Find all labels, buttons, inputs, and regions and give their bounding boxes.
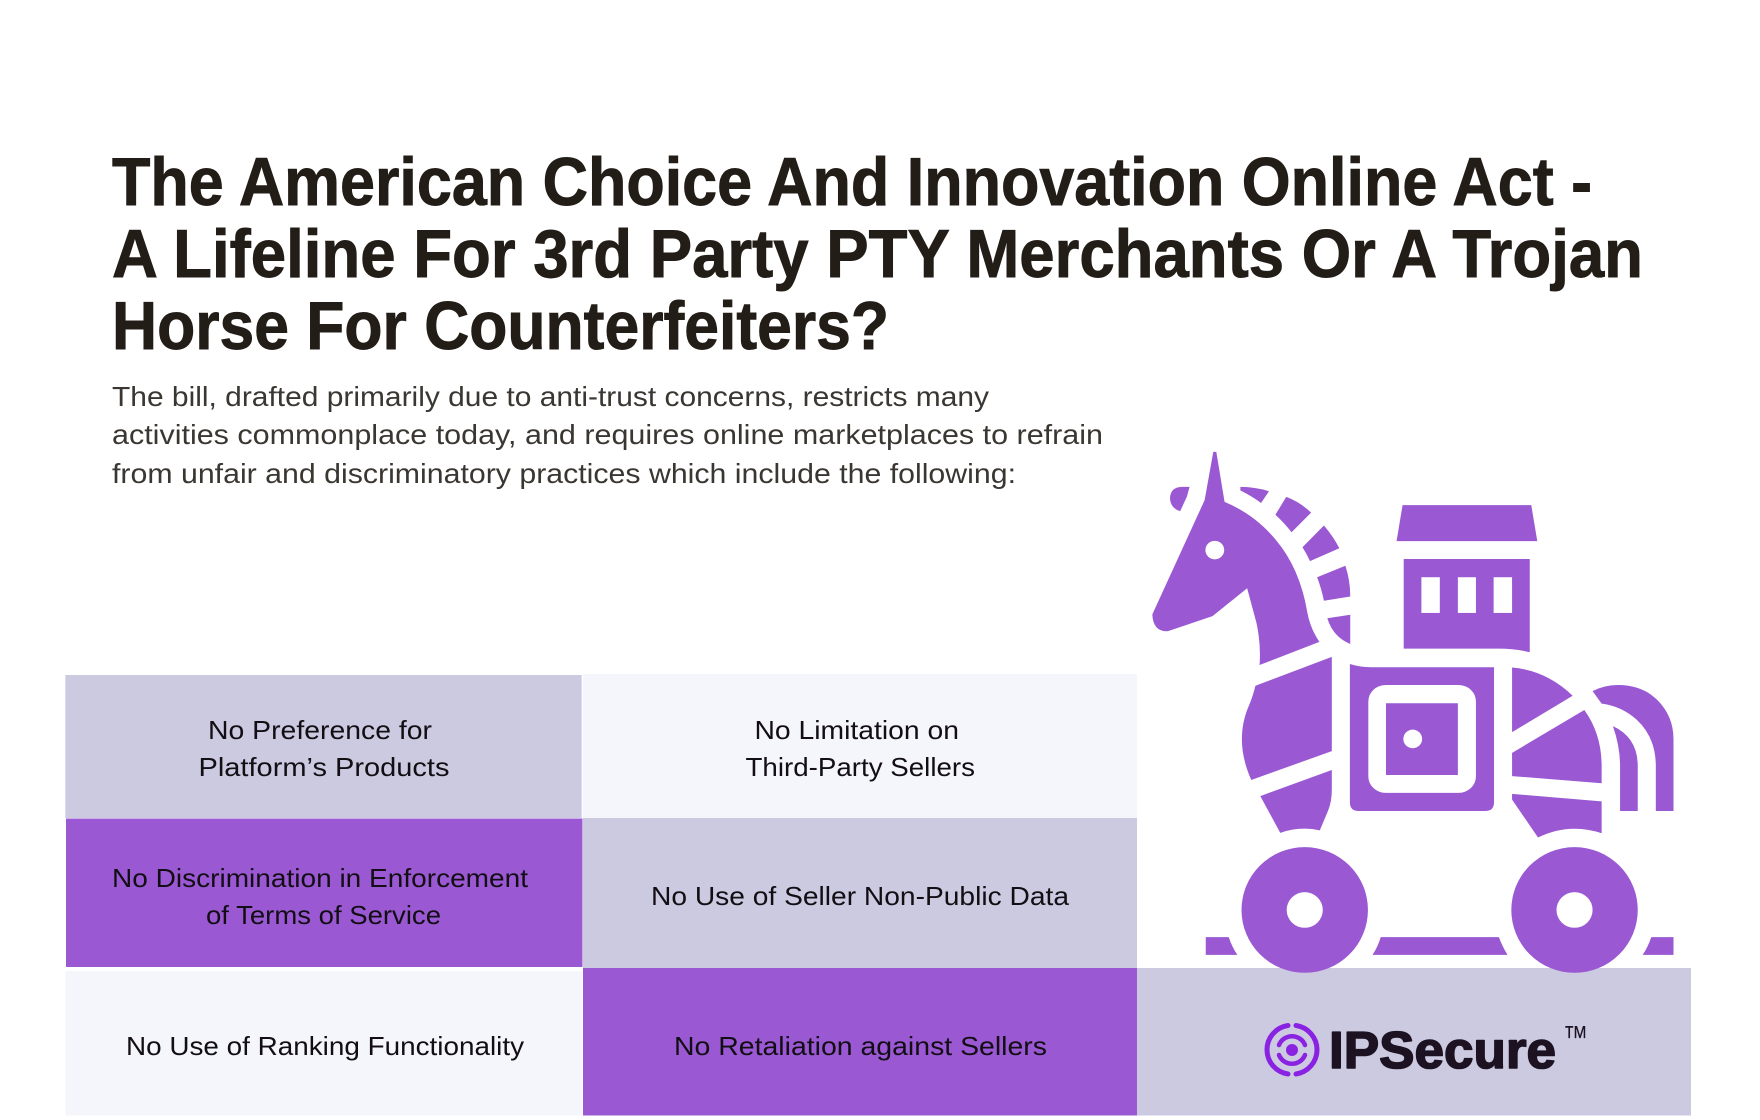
- cell: no use of seller non-public data: [583, 818, 1137, 968]
- panel: logo background: [1137, 968, 1691, 1116]
- cell: no preference for platform's products: [65, 675, 582, 818]
- icon: trojan horse: [1152, 452, 1674, 973]
- logo: IPSecure: IPSecure: [1329, 1022, 1556, 1080]
- cell: no limitation on third-party sellers: Third-Party Sellers: [746, 752, 975, 782]
- logo: IPSecure: ™: [1563, 1019, 1588, 1055]
- cell: no use of ranking functionality: No Use of Ranking Functionality: [126, 1031, 524, 1061]
- intro text: [112, 381, 1103, 489]
- cell: no retaliation against sellers: No Retaliation against Sellers: [674, 1031, 1047, 1061]
- cell: no limitation on third-party sellers: No Limitation on: [754, 715, 959, 745]
- cell: no retaliation against sellers: [583, 968, 1137, 1116]
- icon: logo target mark: [1267, 1026, 1317, 1074]
- cell: no use of ranking functionality: [66, 971, 582, 1116]
- title: A Lifeline For 3rd Party PTY Merchants Or A Trojan: [112, 216, 1643, 292]
- intro text: The bill, drafted primarily due to anti-trust concerns, restricts many: [112, 381, 989, 412]
- logo: IPSecure: [1267, 1019, 1588, 1080]
- intro text: from unfair and discriminatory practices which include the following:: [112, 458, 1016, 489]
- cell: no discrimination in enforcement: No Discrimination in Enforcement: [112, 863, 529, 893]
- cell: no limitation on third-party sellers: [583, 674, 1137, 818]
- cell: no preference for platform's products: No Preference for: [208, 715, 432, 745]
- cell: no discrimination in enforcement: of Terms of Service: [206, 900, 441, 930]
- intro text: activities commonplace today, and requires online marketplaces to refrain: [112, 419, 1103, 450]
- cell: no use of seller non-public data: No Use of Seller Non-Public Data: [651, 881, 1070, 911]
- cell: no discrimination in enforcement: [66, 818, 582, 967]
- title: Horse For Counterfeiters?: [112, 288, 889, 364]
- title: [112, 144, 1643, 364]
- cell: no preference for platform's products: Platform’s Products: [198, 752, 450, 782]
- title: The American Choice And Innovation Online Act -: [112, 144, 1592, 220]
